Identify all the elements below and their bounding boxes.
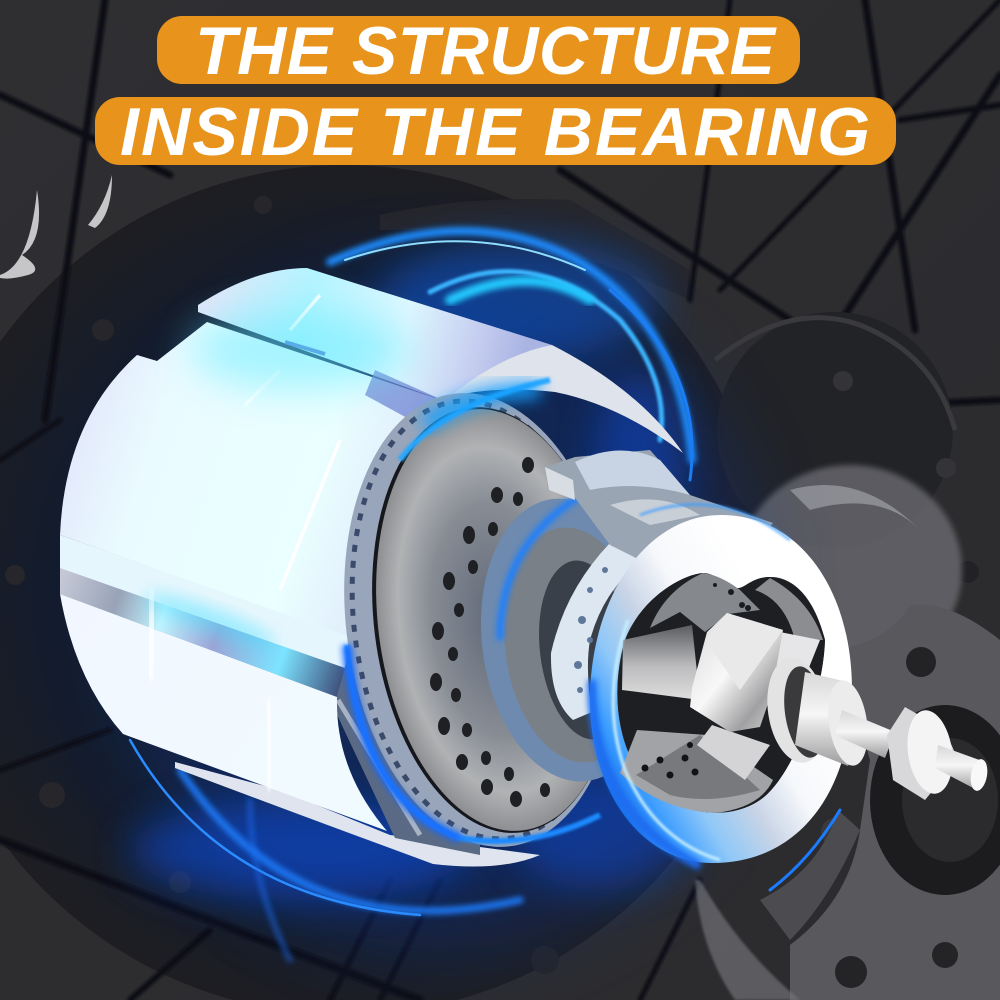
axle tip xyxy=(935,745,985,790)
thin axle xyxy=(835,710,895,758)
front bearing assembly xyxy=(545,450,990,866)
stator core visible between shells xyxy=(330,395,480,855)
band between shells xyxy=(60,535,353,697)
hole interior xyxy=(617,573,825,813)
right brake disc and axle mount xyxy=(695,312,1000,1000)
perforated disc holes xyxy=(430,457,550,807)
left rim highlight xyxy=(0,175,112,279)
upper key block xyxy=(545,450,773,570)
washer xyxy=(761,653,833,767)
upper perforated segment xyxy=(650,573,760,632)
grey streak in the band xyxy=(60,568,345,697)
motor assembly xyxy=(60,268,683,867)
blue swirl arcs behind the motor xyxy=(130,231,840,960)
stator lamination ring xyxy=(319,377,645,863)
axle collar xyxy=(795,672,866,766)
bottom cover strip xyxy=(175,762,540,867)
middle cylinder shell xyxy=(60,322,447,636)
title: first line pill: THE STRUCTURE xyxy=(195,13,778,89)
right shell arc xyxy=(448,345,683,453)
white outer ring xyxy=(590,515,852,863)
left perforated arc xyxy=(551,543,650,720)
title: second line pill: INSIDE THE BEARING xyxy=(120,94,870,170)
lower perforated segment xyxy=(620,730,773,813)
wheel hub dark disc xyxy=(0,165,770,1000)
hex nut xyxy=(690,613,783,732)
cyan bloom xyxy=(190,310,410,390)
top cover shell xyxy=(198,268,552,402)
lower cylinder shell xyxy=(60,594,387,831)
inner hub recess xyxy=(465,488,675,792)
blue ring glow around the disc xyxy=(347,645,600,841)
blue glow xyxy=(120,240,760,950)
bracket right of nut xyxy=(772,632,820,690)
main shaft xyxy=(622,625,700,700)
second collar xyxy=(887,707,958,800)
inner brake grey arcs xyxy=(755,578,823,640)
ring bright inner glow xyxy=(613,620,720,860)
